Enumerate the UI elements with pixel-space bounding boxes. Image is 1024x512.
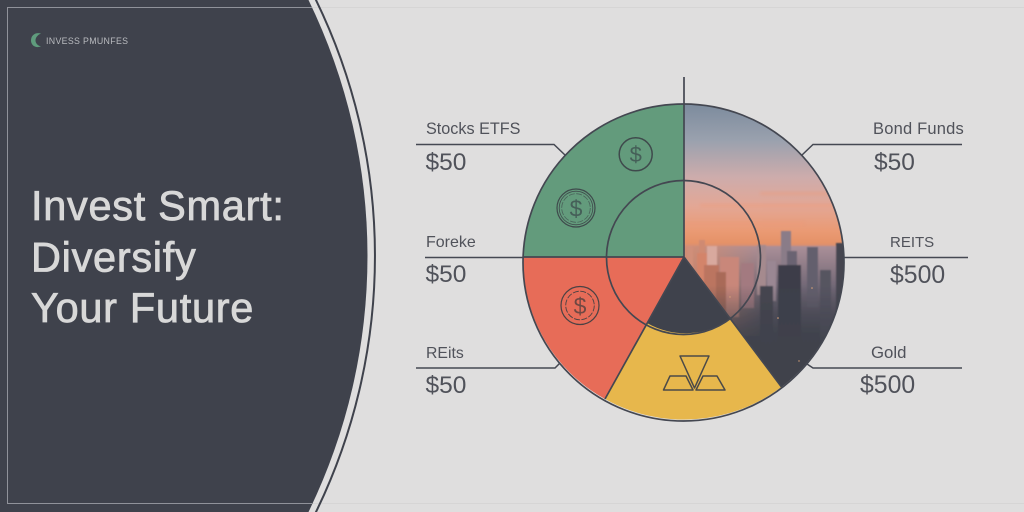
label: Foreke (425, 234, 523, 288)
label: Foreke: $50 (426, 261, 466, 288)
segment: yellow gold (605, 257, 782, 420)
dark centre wedge (647, 257, 730, 333)
segment: green stocks (523, 104, 684, 257)
segment: city sunset photo (684, 104, 844, 387)
title: Invest Smart: (31, 182, 285, 229)
label: Gold: Gold (871, 343, 906, 362)
label: Bond Funds (802, 120, 964, 176)
label: Gold: $500 (860, 372, 915, 399)
icon: dollar coin middle (557, 189, 595, 227)
title (31, 182, 285, 331)
pie chart (523, 77, 850, 421)
label: Foreke: Foreke (426, 234, 476, 251)
pie outlines (523, 77, 844, 421)
icon: dollar coin on red: $ (574, 293, 587, 319)
icon: dollar coin on red (561, 286, 599, 324)
icon: dollar coin top (619, 138, 652, 171)
icon: dollar coin middle: $ (570, 196, 583, 222)
label: REITS (844, 234, 968, 289)
label: Stocks ETFS (416, 120, 565, 176)
brand logo and name: INVESS PMUNFES (46, 36, 128, 46)
label: Bond Funds: Bond Funds (873, 120, 964, 138)
segment: red forex and REITs (523, 257, 684, 399)
label: Stocks ETFS: Stocks ETFS (426, 120, 521, 138)
label: REits: $50 (426, 372, 466, 399)
label: REITS: $500 (890, 262, 945, 289)
city lights (729, 287, 813, 362)
brand logo and name (31, 33, 128, 47)
title: Your Future (31, 284, 254, 331)
title: Diversify (31, 234, 196, 280)
label: Stocks ETFS: $50 (426, 149, 466, 176)
panel: dark left panel (0, 0, 367, 512)
label: REits (416, 345, 560, 399)
icon: dollar coin top: $ (630, 142, 642, 167)
label: REits: REits (426, 345, 464, 362)
icon: gold bars (664, 356, 725, 390)
label: Bond Funds: $50 (874, 149, 915, 176)
label: REITS: REITS (890, 234, 934, 251)
label: Gold (807, 343, 962, 399)
panel edge arc (314, 0, 375, 512)
